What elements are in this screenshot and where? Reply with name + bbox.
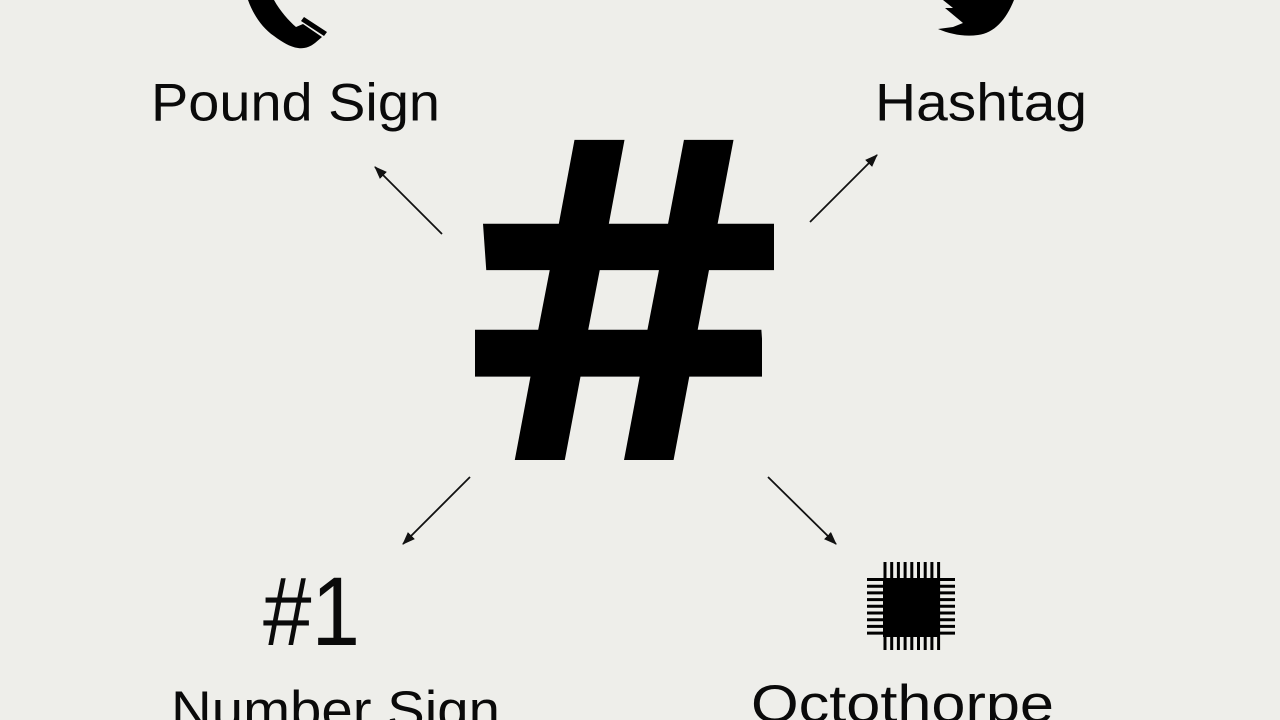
arrow: to Number Sign	[403, 477, 470, 544]
icon: telephone handset	[248, 0, 327, 48]
central hash symbol: #	[414, 46, 835, 565]
icon: microchip	[867, 562, 955, 650]
label: Pound Sign: Pound Sign	[151, 74, 440, 132]
icon: #1: #1	[263, 557, 360, 666]
icon: twitter bird	[938, 0, 1014, 36]
arrow: to Hashtag	[810, 155, 877, 222]
arrow: to Pound Sign	[375, 167, 442, 234]
label: Hashtag: Hashtag	[875, 74, 1087, 132]
arrow: to Octothorpe	[768, 477, 836, 544]
